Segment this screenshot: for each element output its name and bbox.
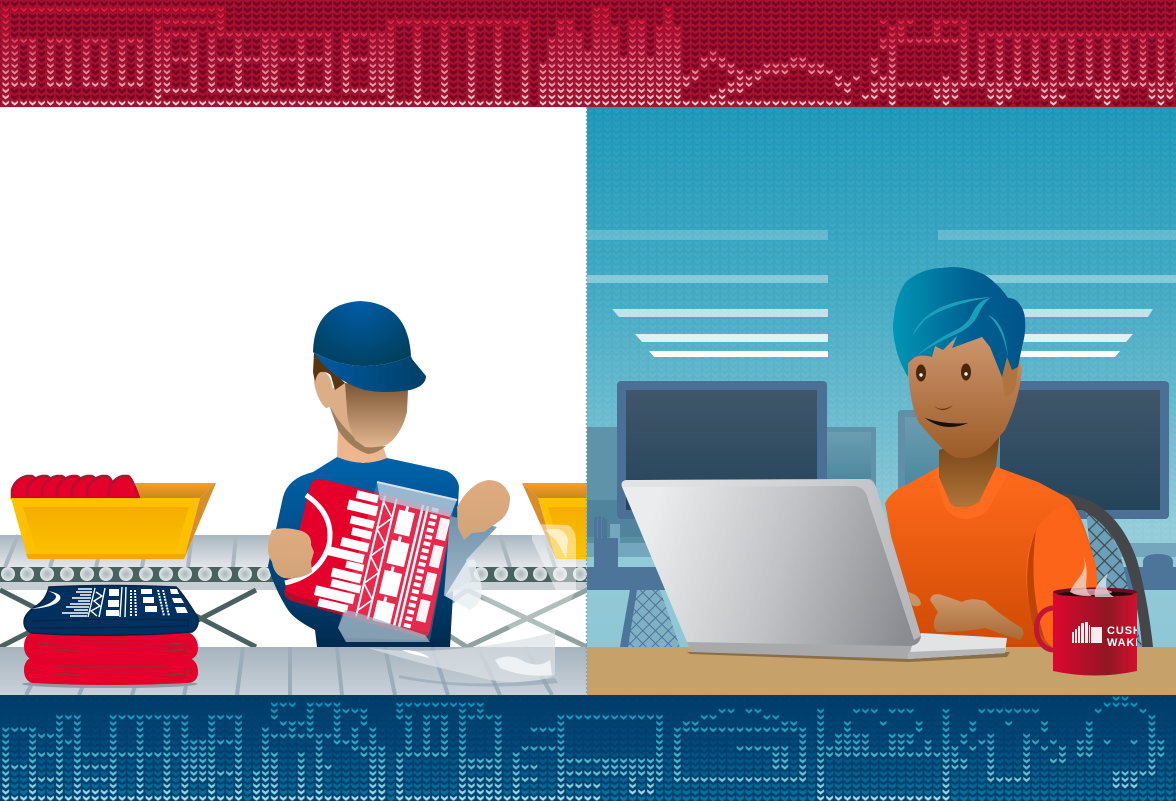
pencil cup xyxy=(594,516,618,567)
t-shirt xyxy=(885,467,1098,647)
far hand xyxy=(908,592,921,606)
office chair xyxy=(1061,493,1153,647)
sleeve xyxy=(1026,505,1098,647)
red shirt upper xyxy=(24,633,198,662)
shirt xyxy=(268,457,459,647)
front table xyxy=(0,647,587,695)
navy shirt pattern xyxy=(62,587,169,617)
steam xyxy=(1070,555,1114,597)
folded shirt stack xyxy=(22,586,198,688)
dotted divider xyxy=(586,107,588,695)
plastic bag over right bin xyxy=(475,524,576,640)
logo: CUSH xyxy=(1107,625,1142,637)
laptop base xyxy=(687,652,1010,662)
person: office worker xyxy=(885,267,1098,647)
coffee mug xyxy=(1036,555,1144,676)
ear shadow xyxy=(1002,357,1018,397)
plastic bag xyxy=(338,482,497,642)
cap xyxy=(313,301,426,392)
background monitor far right xyxy=(898,410,1000,489)
plastic bag on table xyxy=(368,632,558,687)
hair xyxy=(893,267,1025,377)
near hand xyxy=(930,594,1024,640)
eyes xyxy=(916,364,971,382)
jaw shadow xyxy=(329,405,386,454)
background chair xyxy=(620,590,680,647)
red shirts in bin xyxy=(12,476,139,498)
logo: WAKE xyxy=(1107,637,1144,649)
warehouse worker xyxy=(268,301,510,647)
ear xyxy=(314,372,333,408)
laptop xyxy=(622,479,1010,662)
nose xyxy=(934,405,953,410)
panel: office scene xyxy=(587,107,1176,695)
ceiling lights right xyxy=(938,230,1176,357)
desk phone xyxy=(1143,554,1173,567)
navy shirt xyxy=(24,586,198,635)
mouth xyxy=(925,418,968,427)
hair xyxy=(313,353,345,390)
arc xyxy=(285,495,330,583)
ceiling lights left xyxy=(587,230,828,357)
red shirt lower xyxy=(24,658,198,685)
held red shirt xyxy=(284,479,452,637)
neck xyxy=(337,430,387,463)
body xyxy=(1053,592,1137,676)
head side xyxy=(330,383,370,447)
face xyxy=(908,330,1022,458)
yellow bin right xyxy=(522,483,587,559)
monitor right xyxy=(1000,381,1169,519)
monitor left xyxy=(617,381,827,519)
table xyxy=(587,647,1176,695)
handle xyxy=(1036,608,1053,650)
laptop lid xyxy=(622,479,921,646)
knit band: blue office icons bottom xyxy=(0,695,1176,801)
neck xyxy=(939,430,1000,507)
logo xyxy=(1072,622,1137,646)
rollers xyxy=(1,567,587,581)
collar xyxy=(933,467,998,519)
yellow bin left xyxy=(11,476,216,559)
hair strands xyxy=(912,297,992,337)
conveyor belt: back xyxy=(0,301,587,695)
background monitor far left xyxy=(587,427,876,550)
garment pattern xyxy=(311,485,452,632)
hand left xyxy=(268,528,314,578)
panel: warehouse background xyxy=(0,107,587,695)
face xyxy=(345,383,408,447)
knit band: red skyline top xyxy=(0,0,1176,107)
hand right xyxy=(457,480,510,540)
background desk xyxy=(587,524,1176,590)
conveyor legs xyxy=(0,590,587,647)
